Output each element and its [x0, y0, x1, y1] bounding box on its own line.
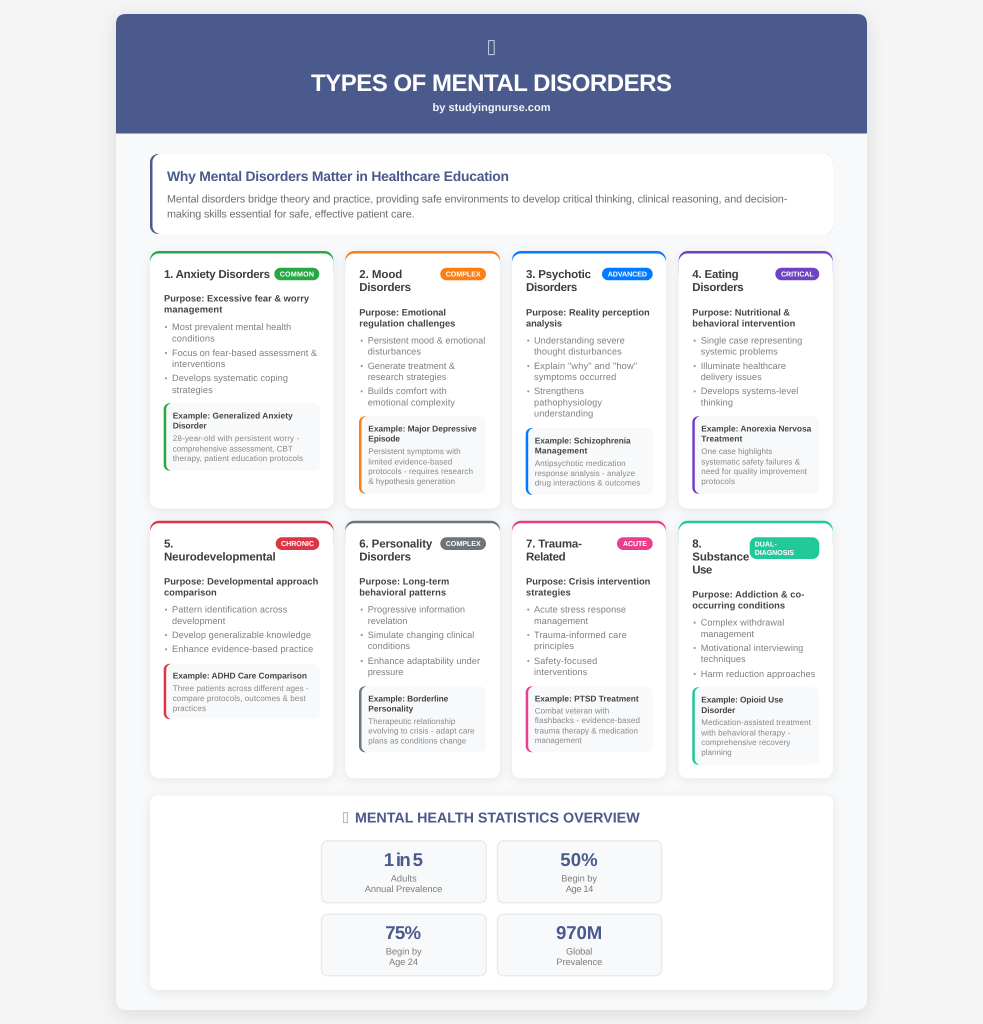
bullet list: conditions: [172, 334, 215, 344]
bullet list: Focus on fear-based assessment &: [172, 348, 317, 358]
bullet list: [694, 336, 802, 408]
bullet list: pathophysiology: [534, 398, 602, 408]
title: TYPES OF MENTAL DISORDERS: [311, 70, 672, 97]
statistics heading: MENTAL HEALTH STATISTICS OVERVIEW: [355, 810, 640, 826]
card title: 5.: [164, 539, 173, 551]
example box: comprehensive recovery: [701, 738, 791, 747]
bullet list: principles: [534, 641, 574, 651]
example box: evolving to crisis - adapt care: [368, 726, 475, 736]
bullet list: thought disturbances: [534, 346, 622, 356]
card title: 8.: [692, 539, 702, 551]
bullet list: [527, 336, 637, 418]
stat: 50%: Age 14: [566, 884, 593, 894]
purpose: regulation challenges: [359, 318, 455, 328]
card title: Disorders: [526, 282, 577, 294]
bullet list: [527, 604, 627, 677]
card title: Substance: [692, 552, 749, 564]
panel: card 2 mood disorders: [345, 251, 500, 508]
bullet list: Understanding severe: [534, 336, 625, 346]
card title: Disorders: [359, 282, 411, 294]
bullet list: Trauma-informed care: [534, 630, 627, 640]
bullet list: Illuminate healthcare: [701, 361, 786, 371]
icon: chart placeholder: [344, 813, 347, 823]
intro heading: Why Mental Disorders Matter in Healthcare Education: [167, 168, 509, 184]
example box: Treatment: [701, 434, 743, 444]
intro text: Mental disorders bridge theory and practice, providing safe environments to develop critical thinking, clinical reasoning, and decision-: [167, 194, 788, 206]
card title: [692, 269, 744, 294]
badge: ADVANCED: [608, 271, 647, 279]
card title: [526, 269, 592, 294]
bullet list: [165, 322, 317, 395]
panel: card 8 substance use: [679, 521, 833, 778]
bullet list: Explain "why" and "how": [534, 361, 637, 371]
purpose: Purpose: Crisis intervention: [526, 576, 651, 586]
panel: statistics overview: [150, 796, 833, 990]
bullet list: emotional complexity: [368, 398, 455, 408]
purpose: [692, 307, 796, 328]
bullet list: interventions: [172, 359, 226, 369]
bullet list: thinking: [701, 398, 733, 408]
stat: 970M: 970M: [556, 922, 602, 943]
panel: card 7 trauma-related: [512, 521, 666, 778]
bullet list: disturbances: [368, 346, 421, 356]
example box: & hypothesis generation: [368, 477, 455, 486]
panel: card 4 eating disorders: [679, 251, 833, 508]
purpose: Purpose: Excessive fear & worry: [164, 294, 310, 304]
example box: need for quality improvement: [701, 467, 808, 476]
example box: compare protocols, outcomes & best: [173, 694, 306, 703]
badge: CHRONIC: [281, 540, 314, 548]
purpose: occurring conditions: [692, 600, 785, 610]
bullet list: [361, 604, 480, 677]
example box: Example: Anorexia Nervosa: [701, 424, 812, 434]
example box: Example: Schizophrenia: [535, 435, 631, 445]
badge: [276, 537, 319, 550]
bullet list: Builds comfort with: [368, 386, 447, 396]
stat: 75%: Begin by: [386, 946, 422, 956]
purpose: Purpose: Reality perception: [526, 307, 650, 317]
badge: COMMON: [280, 271, 314, 279]
example box: flashbacks - evidence-based: [535, 716, 640, 725]
card title: 6. Personality: [359, 539, 433, 551]
bullet list: interventions: [534, 667, 588, 677]
bullet list: Complex withdrawal: [701, 618, 784, 628]
example box: management: [535, 736, 582, 745]
bullet list: Progressive information: [368, 604, 465, 614]
example box: Example: Borderline: [368, 693, 449, 703]
example box: trauma therapy & medication: [535, 726, 638, 736]
card title: 7. Trauma-: [526, 539, 582, 551]
badge: [274, 268, 319, 280]
bullet list: [361, 336, 485, 408]
example box: systematic safety failures &: [701, 458, 801, 466]
stat: 1 in 5: 1 in 5: [384, 849, 423, 870]
panel: card 5 neurodevelopmental: [150, 521, 333, 778]
example box: [692, 687, 819, 765]
bullet list: Generate treatment &: [368, 361, 455, 371]
example box: [526, 428, 653, 495]
bullet list: Most prevalent mental health: [172, 322, 291, 332]
example box: [164, 664, 320, 719]
header band: [116, 14, 867, 134]
card title: Related: [526, 552, 566, 564]
bullet list: conditions: [368, 641, 410, 651]
example box: Medication-assisted treatment: [701, 718, 812, 727]
example box: with behavioral therapy -: [700, 728, 791, 738]
bullet list: management: [701, 629, 754, 639]
bullet list: Enhance adaptability under: [368, 656, 480, 666]
purpose: analysis: [526, 318, 562, 328]
intro text: making skills essential for safe, effective patient care.: [167, 208, 415, 220]
card title: 3. Psychotic: [526, 269, 592, 281]
stat: 970M: [498, 914, 662, 976]
example box: Example: Generalized Anxiety: [173, 411, 293, 421]
bullet list: research strategies: [368, 372, 447, 382]
bullet list: Simulate changing clinical: [368, 630, 474, 640]
panel: card 3 psychotic disorders: [512, 251, 666, 508]
example box: [359, 686, 486, 752]
purpose: management: [164, 305, 222, 315]
bullet list: Harm reduction approaches: [701, 669, 816, 679]
panel: card 6 personality disorders: [345, 521, 500, 778]
panel: intro: [150, 154, 833, 234]
example box: Example: Major Depressive: [368, 424, 477, 434]
stat: 75%: 75%: [385, 922, 421, 943]
purpose: [526, 576, 651, 597]
card title: 4. Eating: [692, 269, 739, 281]
card title: [359, 269, 411, 294]
example box: [692, 416, 819, 494]
purpose: Purpose: Addiction & co-: [692, 589, 804, 599]
stat: 50%: Begin by: [561, 874, 597, 884]
stat: 50%: [498, 841, 662, 903]
bullet list: Safety-focused: [534, 656, 597, 666]
purpose: behavioral intervention: [692, 318, 796, 328]
purpose: [526, 307, 650, 328]
example box: Antipsychotic medication: [535, 459, 626, 468]
bullet list: Single case representing: [701, 336, 802, 346]
badge: DUAL-: [755, 540, 777, 548]
card title: Disorders: [692, 282, 744, 294]
example box: Persistent symptoms with: [368, 447, 461, 456]
badge: [440, 268, 486, 280]
bullet list: Strengthens: [534, 386, 584, 396]
example box: planning: [701, 748, 732, 757]
card title: [692, 539, 749, 576]
card title: Use: [692, 564, 712, 576]
panel: card 1 anxiety disorders: [150, 251, 333, 508]
example box: protocols: [701, 477, 735, 486]
bullet list: understanding: [534, 408, 593, 418]
example box: One case highlights: [701, 447, 772, 456]
purpose: behavioral patterns: [359, 587, 446, 597]
example box: protocols - requires research: [368, 467, 473, 476]
bullet list: techniques: [701, 654, 746, 664]
purpose: comparison: [164, 587, 217, 597]
stat: 1 in 5: Adults: [391, 874, 417, 884]
purpose: [359, 576, 449, 597]
example box: Management: [535, 445, 588, 455]
example box: Disorder: [173, 421, 207, 431]
example box: Combat veteran with: [535, 706, 609, 716]
stat: 1 in 5: [322, 841, 486, 903]
subtitle: by studyingnurse.com: [432, 102, 551, 114]
example box: Three patients across different ages -: [173, 684, 309, 693]
bullet list: pressure: [368, 667, 403, 677]
example box: limited evidence-based: [368, 458, 452, 466]
example box: Episode: [368, 434, 400, 444]
example box: comprehensive assessment, CBT: [173, 444, 293, 454]
panel: main container: [116, 14, 867, 1010]
bullet list: Motivational interviewing: [701, 643, 803, 653]
card title: [526, 539, 582, 564]
stat: 970M: Global: [566, 946, 592, 956]
bullet list: management: [534, 616, 588, 626]
bullet list: strategies: [172, 385, 213, 395]
bullet list: symptoms occurred: [534, 372, 616, 382]
example box: [526, 686, 653, 752]
card title: Disorders: [359, 552, 411, 564]
purpose: [164, 294, 310, 315]
card title: 1. Anxiety Disorders: [164, 269, 270, 281]
example box: drug interactions & outcomes: [535, 478, 640, 488]
purpose: strategies: [526, 587, 571, 597]
card title: [164, 539, 276, 564]
badge: COMPLEX: [446, 271, 481, 279]
example box: Example: PTSD Treatment: [535, 693, 639, 703]
bullet list: revelation: [368, 616, 407, 626]
badge: [750, 537, 819, 559]
stat: 75%: [322, 914, 486, 976]
badge: [617, 537, 653, 550]
stat: 970M: Prevalence: [556, 957, 602, 967]
stat: 50%: 50%: [560, 849, 598, 870]
bullet list: Pattern identification across: [172, 604, 288, 614]
icon: brain placeholder: [489, 41, 494, 55]
badge: [440, 537, 486, 550]
purpose: [359, 307, 455, 328]
example box: Example: Opioid Use: [701, 695, 784, 705]
card title: Neurodevelopmental: [164, 552, 276, 564]
badge: ACUTE: [623, 540, 647, 548]
bullet list: systemic problems: [701, 346, 778, 356]
example box: [164, 403, 320, 471]
example box: 28-year-old with persistent worry -: [173, 434, 300, 443]
example box: [359, 416, 486, 494]
stat: 75%: Age 24: [389, 957, 418, 967]
purpose: [692, 589, 804, 610]
example box: plans as conditions change: [368, 736, 467, 746]
bullet list: Develop generalizable knowledge: [172, 630, 311, 640]
bullet list: delivery issues: [701, 372, 762, 382]
example box: therapy, patient education protocols: [173, 454, 303, 463]
badge: CRITICAL: [781, 271, 814, 279]
stat: 1 in 5: Annual Prevalence: [365, 884, 442, 894]
intro text: [167, 194, 788, 220]
bullet list: [165, 604, 313, 654]
example box: Personality: [368, 703, 414, 713]
example box: Disorder: [701, 705, 736, 715]
purpose: [164, 576, 319, 597]
bullet list: Develops systematic coping: [172, 373, 288, 383]
badge: [602, 268, 653, 280]
bullet list: Acute stress response: [534, 604, 626, 614]
bullet list: Persistent mood & emotional: [368, 336, 485, 346]
example box: practices: [173, 704, 206, 713]
purpose: Purpose: Long-term: [359, 576, 449, 586]
badge: [775, 268, 819, 280]
card title: 2. Mood: [359, 269, 402, 281]
badge: DIAGNOSIS: [755, 549, 794, 557]
bullet list: Develops systems-level: [701, 386, 798, 396]
example box: Example: ADHD Care Comparison: [173, 671, 307, 681]
purpose: Purpose: Developmental approach: [164, 576, 319, 586]
example box: Therapeutic relationship: [368, 717, 456, 726]
card title: [359, 539, 433, 564]
purpose: Purpose: Nutritional &: [692, 307, 790, 317]
bullet list: development: [172, 616, 226, 626]
badge: COMPLEX: [446, 540, 481, 548]
example box: response analysis - analyze: [535, 469, 635, 478]
purpose: Purpose: Emotional: [359, 307, 446, 317]
bullet list: [694, 618, 816, 679]
bullet list: Enhance evidence-based practice: [172, 644, 313, 654]
